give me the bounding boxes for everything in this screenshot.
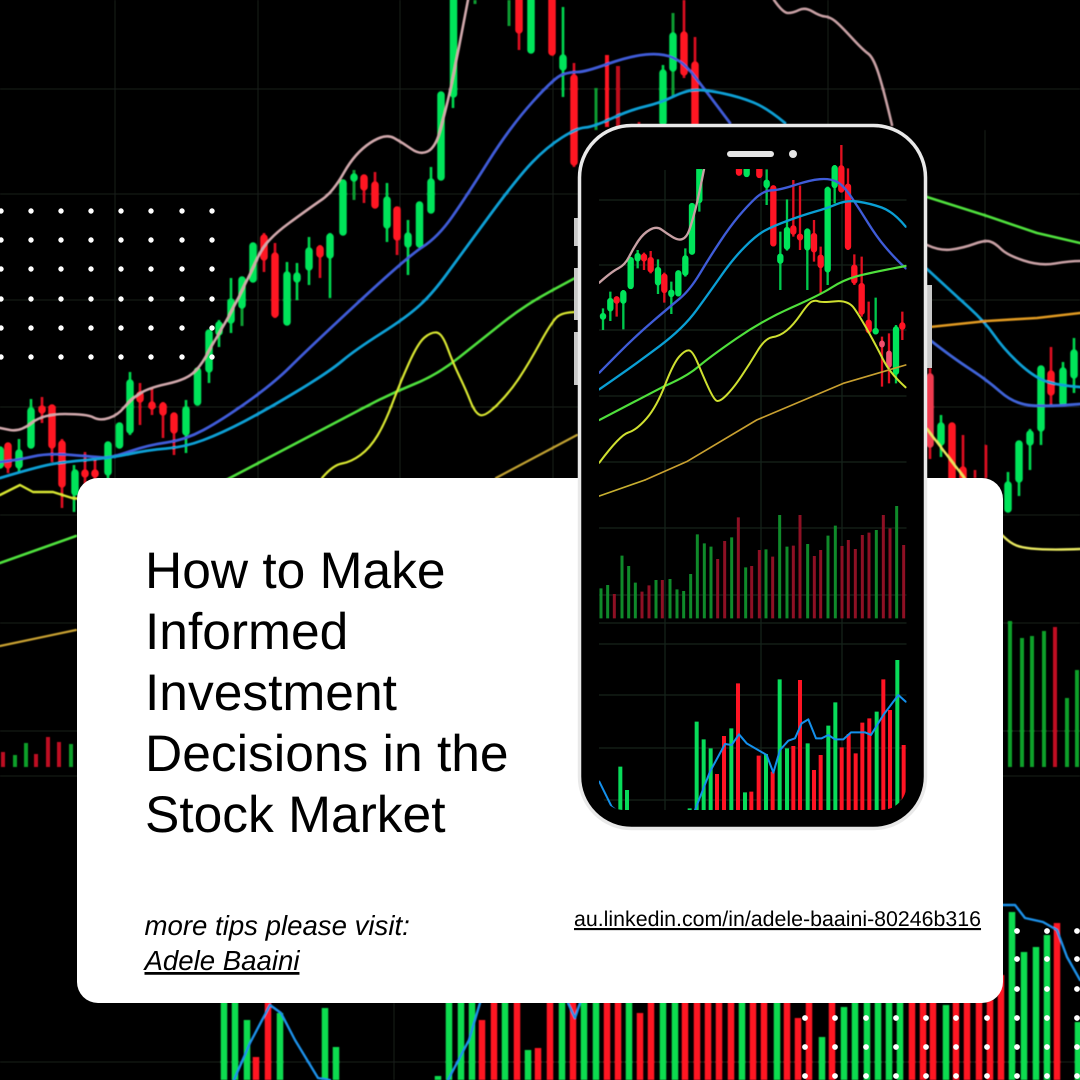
screen grid xyxy=(599,145,907,810)
background small volume bars xyxy=(3,621,1077,767)
screen volume bars xyxy=(601,506,904,618)
screen indicator bars xyxy=(599,480,906,813)
call to action text: Adele Baaini xyxy=(142,945,300,976)
title: Informed xyxy=(145,602,348,660)
phone screen chart xyxy=(599,145,907,813)
screen candlesticks xyxy=(603,145,902,387)
screen moving average lines xyxy=(599,169,906,480)
panel: white card xyxy=(77,478,1003,1003)
call to action text: more tips please visit: xyxy=(144,910,410,941)
background large volume bars xyxy=(224,912,1078,1080)
title: Investment xyxy=(145,663,397,721)
title: Decisions in the xyxy=(145,724,509,782)
title: How to Make xyxy=(145,541,446,599)
phone side buttons xyxy=(576,218,930,385)
phone notch xyxy=(665,145,830,169)
dot grid: top left xyxy=(1,211,212,357)
background indicator lines xyxy=(234,905,1080,1080)
title: Stock Market xyxy=(145,785,446,843)
background candle wicks xyxy=(8,0,1074,512)
phone body xyxy=(580,126,926,828)
linkedin link: au.linkedin.com/in/adele-baaini-80246b316 xyxy=(574,907,981,931)
phone mockup xyxy=(576,126,930,828)
phone speaker xyxy=(727,151,774,157)
phone camera xyxy=(789,150,797,158)
background candle bodies xyxy=(0,0,1074,509)
dot grid: bottom right xyxy=(805,931,1077,1076)
background moving average lines xyxy=(0,0,1080,646)
